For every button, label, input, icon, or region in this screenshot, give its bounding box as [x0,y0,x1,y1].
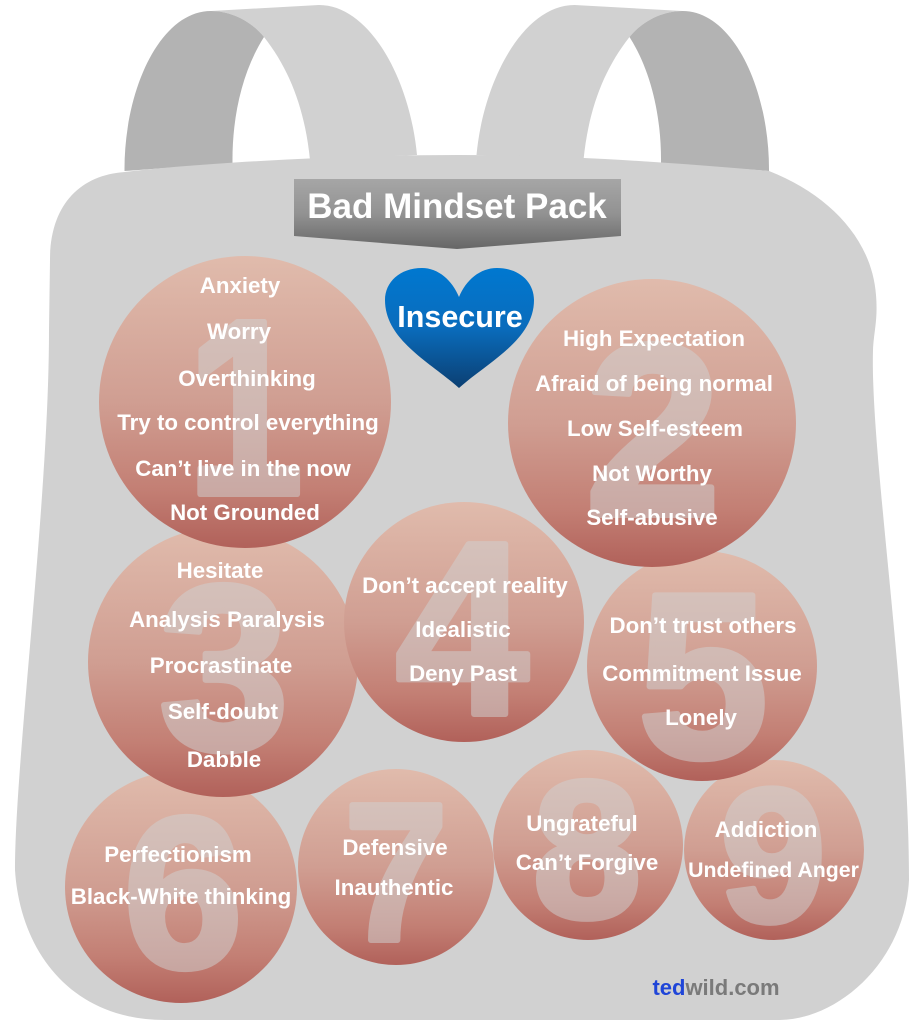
circle 1: 1 [187,268,303,547]
circle 8 [493,741,683,959]
circle 6: Perfectionism [104,842,252,867]
circle 4 [344,491,584,767]
circle 1: Overthinking [178,366,316,391]
circle 7 [298,763,494,982]
circle 2: High Expectation [563,326,745,351]
circle 7: 7 [344,763,448,982]
circle 9 [684,750,864,962]
circle 8: Ungrateful [526,811,638,836]
circle 2 [508,279,796,567]
circle 1: Can’t live in the now [135,456,351,481]
circle 5: Commitment Issue [602,661,802,686]
circle 2: Not Worthy [592,461,712,486]
circle 9: 9 [720,750,826,962]
circle 7: Inauthentic [335,875,453,900]
watermark: tedwild.com: tedwild.com [652,975,780,1000]
circle 2: Self-abusive [586,505,718,530]
circle 1: Try to control everything [117,410,379,435]
circle 6: 6 [123,772,243,1013]
circle 3: Self-doubt [168,699,279,724]
circle 3: Hesitate [177,558,263,583]
circle 8: 8 [533,741,641,959]
circle 5: 5 [638,544,768,807]
circle 1: Worry [207,319,272,344]
circle 3: Dabble [187,747,261,772]
circle 5 [587,544,817,807]
circle 4: 4 [395,491,529,767]
circle 4: Deny Past [409,661,517,686]
circle 1: Not Grounded [170,500,320,525]
heart: Insecure [385,268,534,388]
circle 9: Undefined Anger [688,858,859,882]
circle 3: Procrastinate [150,653,292,678]
circle 2: 2 [585,293,721,567]
circle 8: Can’t Forgive [516,850,658,875]
circle 9: Addiction [715,817,817,842]
circle 6: Black-White thinking [71,884,291,909]
left strap [124,5,417,171]
circle 4: Idealistic [415,617,511,642]
circle 4: Don’t accept reality [362,573,568,598]
circle 3 [88,527,358,799]
title banner [294,179,621,249]
circle 2: Afraid of being normal [535,371,773,396]
circle 2: Low Self-esteem [567,416,743,441]
circle 7: Defensive [342,835,448,860]
circle 5: Lonely [665,705,738,730]
right strap [476,5,769,171]
circle 6 [65,771,297,1013]
circle 5: Don’t trust others [609,613,797,638]
circle 1 [99,256,391,548]
circle 3: 3 [159,536,289,799]
circle 3: Analysis Paralysis [129,607,325,632]
heart label: Insecure [397,300,523,334]
title text: Bad Mindset Pack [307,187,607,226]
circle 1: Anxiety [200,273,281,298]
